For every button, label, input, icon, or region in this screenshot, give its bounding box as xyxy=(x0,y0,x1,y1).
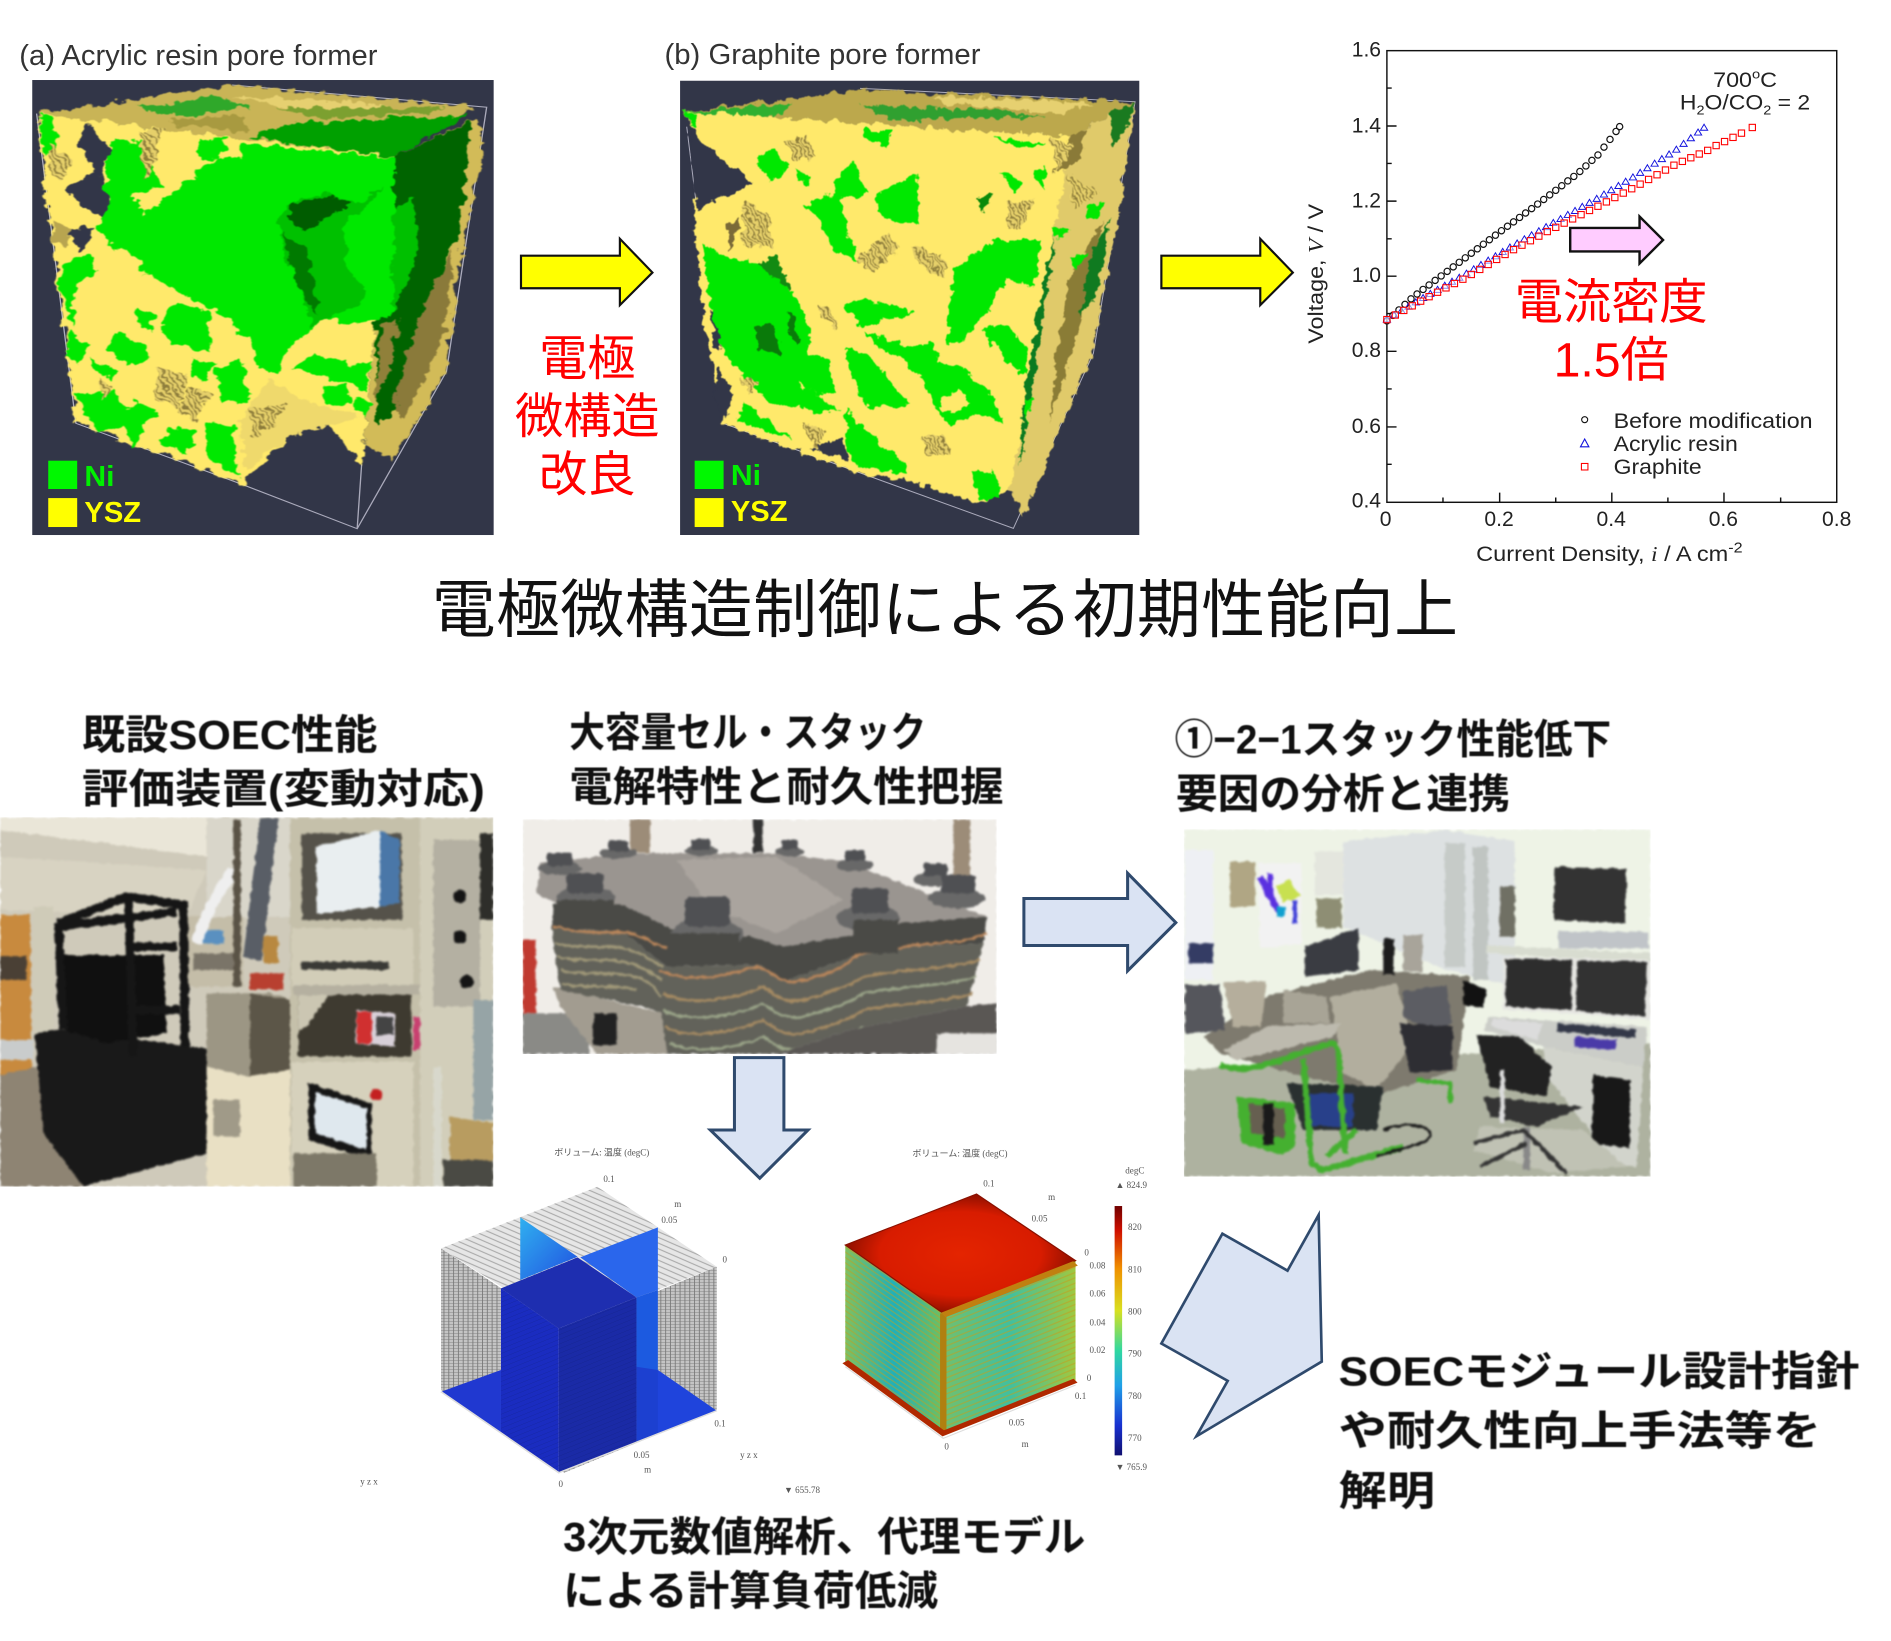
y axis title: Voltage, V / V xyxy=(1304,204,1328,344)
simulation: stack temperature cube xyxy=(740,1148,1147,1472)
legend: YSZ swatch and label: YSZ xyxy=(731,496,788,528)
heading: stack degradation analysis: ①−2−1スタック性能低下 xyxy=(1175,717,1611,763)
simulation labels and colour scale: 770 xyxy=(1128,1433,1142,1443)
simulation labels and colour scale: 0.08 xyxy=(1090,1261,1106,1271)
simulation labels: 0.05 xyxy=(634,1450,650,1460)
simulation labels: y z x xyxy=(360,1477,378,1487)
simulation labels and colour scale: ▼ 765.9 xyxy=(1115,1462,1147,1472)
heading: stack degradation analysis xyxy=(1175,717,1611,817)
simulation labels and colour scale xyxy=(740,1148,1147,1472)
photo: large capacity stack xyxy=(523,819,997,1054)
callout: current density 1.5 times: 電流密度 xyxy=(1515,275,1708,329)
callout: electrode microstructure improvement: 微構造 xyxy=(515,390,660,444)
photo: analysis instrument lab xyxy=(1184,829,1651,1177)
chart legend: Acrylic resin xyxy=(1614,433,1738,456)
conclusion: SOEC module design guidance: SOECモジュール設計指針 xyxy=(1339,1349,1860,1395)
heading: existing SOEC test equipment: 既設SOEC性能 xyxy=(82,712,377,758)
axis tick labels xyxy=(1352,39,1851,531)
heading: large cell stack durability: 電解特性と耐久性把握 xyxy=(569,764,1003,810)
axis tick labels: 0.8 xyxy=(1822,508,1851,531)
x axis title: -2 xyxy=(1728,540,1743,556)
simulation labels: m xyxy=(644,1465,651,1475)
axis tick labels: 0.8 xyxy=(1352,339,1381,362)
simulation labels and colour scale: y z x xyxy=(740,1450,758,1460)
simulation labels and colour scale: m xyxy=(1022,1439,1029,1449)
label: acrylic resin pore former: (a) Acrylic resin pore former xyxy=(19,40,378,72)
simulation labels and colour scale: 0 xyxy=(1087,1373,1092,1383)
axis tick labels: 1.0 xyxy=(1352,264,1381,287)
conclusion: SOEC module design guidance xyxy=(1339,1349,1860,1514)
simulation labels and colour scale: m xyxy=(1048,1192,1055,1202)
heading: existing SOEC test equipment xyxy=(82,712,485,812)
legend: YSZ swatch and label xyxy=(695,496,788,528)
axis tick labels: 0.6 xyxy=(1709,508,1738,531)
axis tick labels: 0.4 xyxy=(1352,490,1381,513)
axis tick labels: 0.6 xyxy=(1352,415,1381,438)
axis tick labels: 1.2 xyxy=(1352,189,1381,212)
simulation labels and colour scale: 0.06 xyxy=(1090,1288,1106,1298)
simulation labels and colour scale: 0.1 xyxy=(1075,1391,1086,1401)
arrow: pink shift arrow xyxy=(1570,216,1663,264)
callout: current density 1.5 times: 1.5倍 xyxy=(1554,333,1669,387)
simulation labels and colour scale: 790 xyxy=(1128,1349,1142,1359)
simulation labels: 0.05 xyxy=(661,1215,678,1225)
label: graphite pore former: (b) Graphite pore former xyxy=(665,39,981,71)
legend: YSZ swatch and label: YSZ xyxy=(84,497,141,529)
conditions note: o xyxy=(1752,66,1760,81)
heading: large cell stack durability xyxy=(569,710,1003,810)
legend: Ni swatch and label xyxy=(48,461,115,493)
chart legend: Graphite xyxy=(1614,456,1702,479)
simulation labels and colour scale: 0.02 xyxy=(1090,1345,1106,1355)
legend: Ni swatch and label: Ni xyxy=(84,461,115,493)
simulation labels and colour scale: 800 xyxy=(1128,1307,1142,1317)
heading: 3D numerical analysis xyxy=(563,1514,1085,1614)
simulation labels: 0.1 xyxy=(714,1419,726,1429)
arrow: toward module design conclusions xyxy=(1161,1215,1322,1436)
x axis title: Current Density, i / A cm xyxy=(1476,542,1721,566)
simulation labels and colour scale: 820 xyxy=(1128,1222,1142,1232)
legend: YSZ swatch and label xyxy=(48,497,141,529)
chart legend xyxy=(1580,410,1813,479)
simulation labels and colour scale: 0.05 xyxy=(1032,1214,1048,1224)
simulation labels: ボリューム: 温度 (degC) xyxy=(554,1146,649,1157)
simulation labels and colour scale: ▲ 824.9 xyxy=(1115,1180,1147,1190)
legend: Ni swatch and label: Ni xyxy=(731,460,761,492)
arrow: yellow arrow to voltage chart xyxy=(1161,239,1293,305)
chart legend: Before modification xyxy=(1614,410,1813,433)
axis tick labels: 0 xyxy=(1380,508,1392,531)
photo: SOEC evaluation apparatus xyxy=(0,817,493,1187)
simulation labels: 0 xyxy=(559,1479,564,1489)
series: acrylic resin xyxy=(1387,128,1704,320)
simulation labels and colour scale: 0.05 xyxy=(1009,1417,1025,1427)
simulation labels and colour scale: ボリューム: 温度 (degC) xyxy=(912,1148,1008,1159)
conclusion: SOEC module design guidance: や耐久性向上手法等を xyxy=(1339,1408,1821,1454)
simulation labels xyxy=(360,1146,820,1495)
axis tick labels: 1.4 xyxy=(1352,115,1381,138)
callout: current density 1.5 times xyxy=(1515,275,1708,387)
conclusion: SOEC module design guidance: 解明 xyxy=(1339,1468,1435,1514)
title: initial performance improvement: 電極微構造制御による初期性能向上 xyxy=(432,574,1458,646)
conditions note: 2 xyxy=(1763,103,1771,118)
heading: 3D numerical analysis: による計算負荷低減 xyxy=(563,1568,938,1614)
arrow: yellow arrow to graphite result xyxy=(521,239,652,305)
panel: acrylic resin microstructure cube xyxy=(32,80,494,535)
simulation labels and colour scale: 810 xyxy=(1128,1264,1142,1274)
conditions note xyxy=(1680,66,1810,118)
panel: graphite microstructure cube xyxy=(680,81,1139,535)
heading: large cell stack durability: 大容量セル・スタック xyxy=(569,710,926,756)
conditions note: O/CO xyxy=(1705,92,1763,115)
simulation labels and colour scale: 780 xyxy=(1128,1391,1142,1401)
simulation labels and colour scale: 0.1 xyxy=(983,1179,995,1189)
simulation labels: ▼ 655.78 xyxy=(784,1485,820,1495)
series: before modification xyxy=(1387,127,1620,321)
conditions note: C xyxy=(1760,69,1777,92)
axis tick labels: 0.2 xyxy=(1484,508,1514,531)
simulation labels: 0.1 xyxy=(603,1174,615,1184)
simulation labels and colour scale: degC xyxy=(1125,1165,1144,1175)
simulation: temperature slice plot xyxy=(360,1146,820,1495)
heading: existing SOEC test equipment: 評価装置(変動対応) xyxy=(82,766,485,812)
series: graphite xyxy=(1387,127,1752,320)
arrow: stack to simulation xyxy=(710,1058,808,1178)
callout: electrode microstructure improvement: 改良 xyxy=(539,448,636,502)
simulation labels: 0 xyxy=(723,1255,728,1265)
conditions note: H xyxy=(1680,92,1695,115)
axis tick labels: 1.6 xyxy=(1352,39,1381,62)
heading: stack degradation analysis: 要因の分析と連携 xyxy=(1176,771,1510,817)
heading: 3D numerical analysis: 3次元数値解析、代理モデル xyxy=(563,1514,1085,1560)
conditions note: = 2 xyxy=(1771,92,1810,115)
simulation labels and colour scale: 0.04 xyxy=(1090,1317,1106,1327)
callout: electrode microstructure improvement xyxy=(515,332,660,502)
simulation labels: m xyxy=(674,1199,681,1209)
conditions note: 700 xyxy=(1713,69,1748,92)
conditions note: 2 xyxy=(1697,103,1705,118)
legend: Ni swatch and label xyxy=(695,460,761,492)
simulation labels and colour scale: 0 xyxy=(1084,1247,1089,1257)
arrow: stack to analysis xyxy=(1024,873,1176,971)
plot frame and ticks xyxy=(1387,51,1837,502)
callout: electrode microstructure improvement: 電極 xyxy=(539,332,636,386)
chart: voltage vs current density xyxy=(1304,39,1851,566)
axis tick labels: 0.4 xyxy=(1597,508,1626,531)
simulation labels and colour scale: 0 xyxy=(944,1442,949,1452)
